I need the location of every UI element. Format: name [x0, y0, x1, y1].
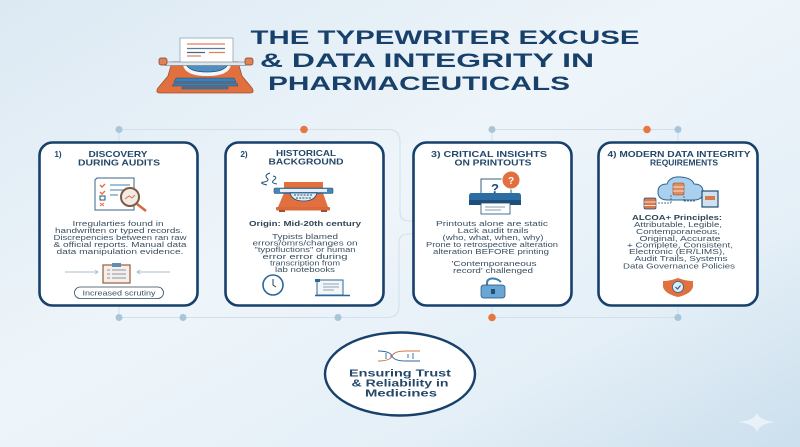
panel 1 heading: 1) [54, 150, 62, 159]
panel 3 body text: Lack audit trails [458, 226, 529, 235]
panel 4 body text: Data Governance Policies [623, 262, 735, 270]
origin line: Origin: Mid-20th century [249, 219, 362, 228]
panel 3 body text: record' challenged [453, 266, 533, 275]
panel 2 body text: error error during [262, 252, 348, 261]
panel 3 heading: ON PRINTOUTS [454, 158, 532, 168]
icon: typewriter with paper [157, 38, 253, 93]
panel 1 body text: Discrepencies between ran raw [54, 233, 187, 242]
panel 2 body text: Typists blamed [272, 232, 338, 241]
panel 1 heading [54, 150, 161, 168]
panel 1 body text: handwritten or typed records. [55, 226, 183, 235]
panel 4 body text: ALCOA+ Principles: [632, 213, 722, 222]
icon: sparkle watermark [738, 413, 775, 432]
icon: open lock [481, 278, 505, 298]
panel 1 heading: DISCOVERY [88, 150, 148, 159]
panel 1 body text [54, 219, 188, 256]
panel 4 body text: Attributable, Legible, [634, 220, 722, 229]
panel 4 body text: Electronic (ER/LIMS), [629, 247, 725, 256]
panel: critical insights on printouts [414, 142, 572, 306]
icon: clipboard with arrows [65, 263, 170, 283]
panel 2 body text [252, 232, 358, 274]
panel 4 body text: + Complete, Consistent, [627, 240, 733, 250]
panel 3 heading [431, 150, 548, 168]
panel 3 body text: Prone to retrospective alteration [426, 240, 558, 249]
panel 1 body text: & official reports. Manual data [54, 240, 188, 249]
panel 1 body text: data manipulation evidence. [56, 247, 184, 256]
pill: increased scrutiny: Increased scrutiny [82, 288, 156, 298]
panel 2 body text: transcription from [270, 258, 340, 268]
panel 2 heading: BACKGROUND [268, 158, 344, 166]
icon: scroll [315, 279, 350, 296]
panel 3 body text: 'Contemporaneous [452, 259, 537, 268]
icon: cloud, database and screen [644, 177, 718, 209]
panel: discovery during audits [40, 142, 198, 306]
panel 4 body text: Contemporaneous, [636, 227, 720, 236]
icon: checklist with magnifier [95, 178, 146, 211]
panel 3 body text: alteration BEFORE printing [433, 247, 549, 256]
connector lines [116, 126, 682, 321]
panel 3 body text: (who, what, when, why) [442, 233, 544, 242]
icon: DNA helix [378, 351, 420, 361]
icon: shield with check [663, 278, 693, 297]
panel: modern data integrity requirements [598, 142, 758, 306]
pill: increased scrutiny [74, 287, 164, 298]
icon: printer with question mark [469, 171, 521, 214]
panel 2 heading [240, 149, 344, 166]
panel 2 body text: "typofluctions" or human [254, 245, 356, 254]
conclusion text: Ensuring Trust [349, 368, 452, 380]
conclusion text: Medicines [365, 388, 438, 400]
icon: printer with question mark: ? [508, 176, 514, 187]
panel 4 body text: Audit Trails, Systems [634, 254, 728, 263]
icon: vintage typewriter with smoke [262, 173, 333, 212]
panel 4 body text [623, 213, 735, 270]
icon: printer with question mark: ? [491, 181, 499, 196]
panel: historical background [226, 142, 384, 306]
panel 3 heading: 3) CRITICAL INSIGHTS [431, 150, 548, 159]
panel 4 heading: REQUIREMENTS [650, 158, 719, 168]
conclusion ellipse [325, 332, 475, 416]
title: THE TYPEWRITER EXCUSE [250, 28, 640, 49]
panel 4 heading: 4) MODERN DATA INTEGRITY [608, 150, 751, 159]
title [250, 28, 640, 95]
panel 4 heading [608, 150, 751, 168]
conclusion text [349, 368, 452, 400]
panel 2 heading: 2) [240, 150, 248, 159]
panel 1 heading: DURING AUDITS [78, 158, 161, 168]
panel 3 body text [426, 219, 558, 275]
panel 1 body text: Irregularties found in [72, 219, 164, 228]
title: PHARMACEUTICALS [268, 74, 570, 95]
panel 3 body text: Printouts alone are static [436, 219, 548, 228]
panel 4 body text: Original, Accurate [640, 234, 720, 243]
panel 2 body text: errors/omrs/changes on [252, 238, 358, 248]
panel 2 heading: HISTORICAL [276, 149, 336, 158]
panel 2 body text: lab notebooks [275, 265, 335, 274]
conclusion text: & Reliability in [352, 378, 448, 390]
icon: clock [263, 275, 283, 295]
title: & DATA INTEGRITY IN [260, 51, 594, 72]
